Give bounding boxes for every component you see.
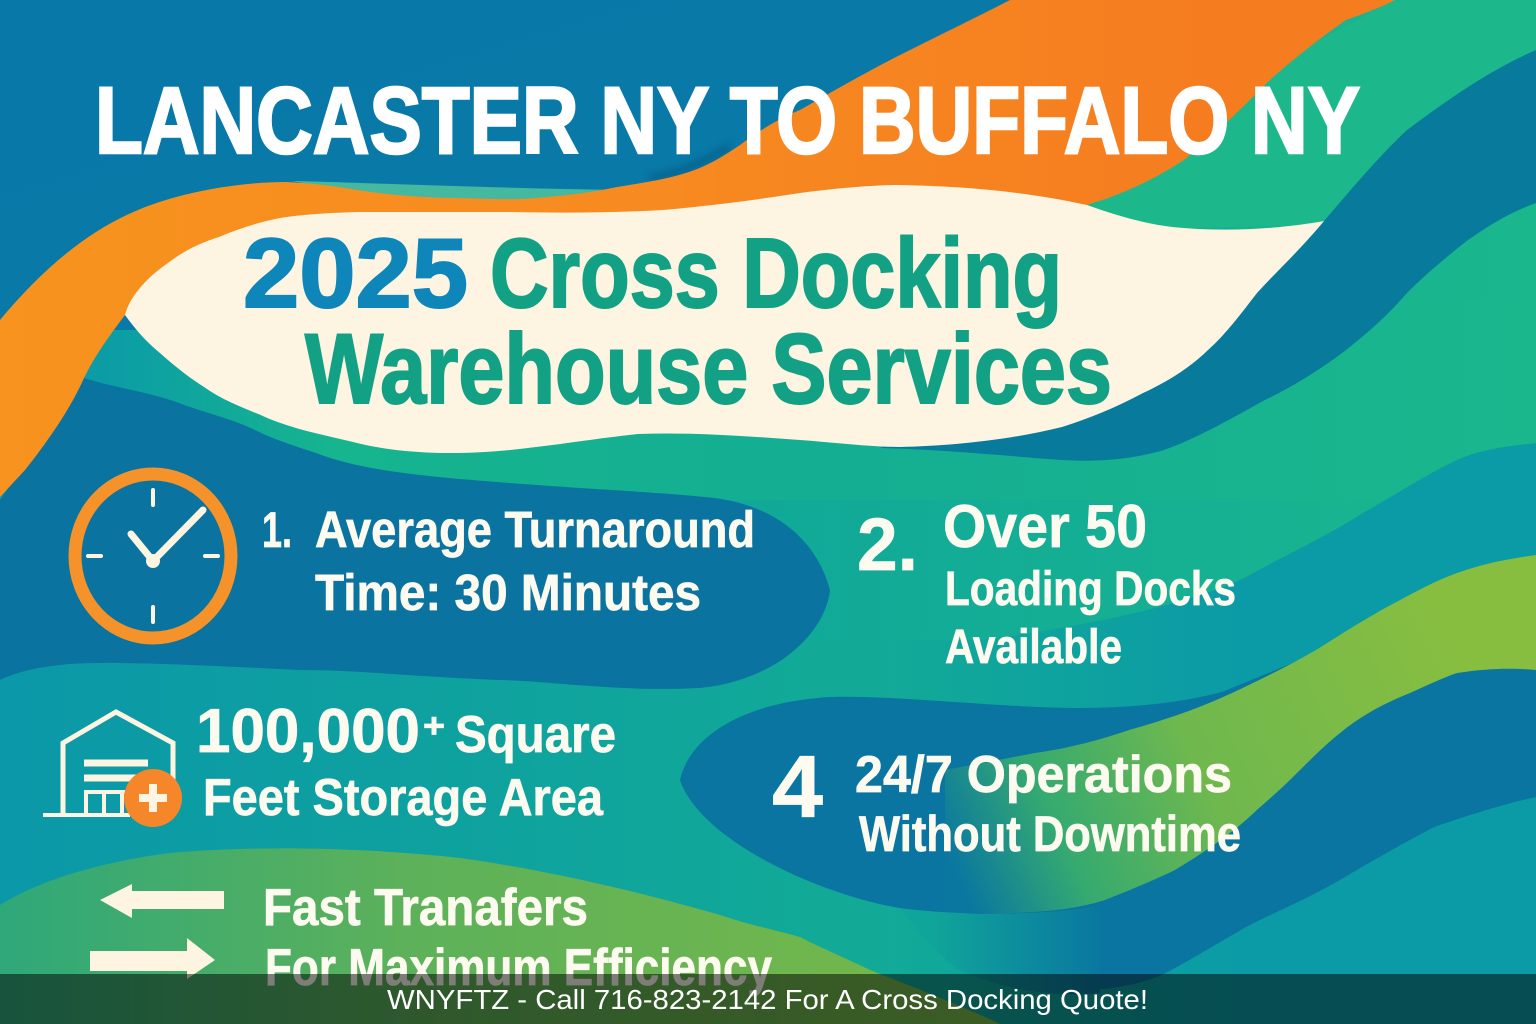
teal wave highlight above orange band	[291, 181, 620, 202]
item 5: fast transfers	[263, 879, 772, 997]
item 1: average turnaround: Time: 30 Minutes	[315, 564, 701, 621]
icon: warehouse with plus badge	[43, 712, 182, 827]
footer bar	[0, 974, 1536, 1024]
headline: 2025 Cross Docking Warehouse Services	[243, 218, 1112, 424]
item 4: 24/7 operations: 24/7 Operations	[855, 746, 1232, 804]
blue blob behind item 4	[680, 640, 1536, 990]
item 1: average turnaround: Average Turnaround	[315, 501, 755, 558]
item 3: storage area: Square	[455, 706, 616, 764]
item 2: loading docks: Over 50	[943, 493, 1147, 560]
item 3: storage area: Feet Storage Area	[203, 769, 604, 827]
item 3: storage area: +	[423, 707, 445, 745]
blue blob fade at lower edge	[900, 905, 1100, 994]
item 5: fast transfers: Fast Tranafers	[263, 879, 588, 937]
icon: transfer arrows	[90, 884, 224, 979]
item 2: loading docks: 2.	[857, 503, 918, 586]
cream headline shape	[125, 185, 1324, 453]
icon: clock with check	[75, 474, 231, 638]
item 3: storage area: 100,000	[196, 697, 420, 766]
item 1: average turnaround	[262, 501, 755, 621]
headline: 2025 Cross Docking Warehouse Services: Cross Docking	[490, 218, 1062, 328]
item 2: loading docks: Available	[945, 621, 1122, 674]
headline: 2025 Cross Docking Warehouse Services: Warehouse Services	[305, 313, 1112, 424]
item 4: 24/7 operations	[772, 737, 1241, 862]
lime hill bottom left	[0, 848, 1000, 1024]
item 5: fast transfers: For Maximum Efficiency	[265, 939, 772, 997]
headline: 2025 Cross Docking Warehouse Services: 2025	[243, 218, 468, 328]
dark blue band behind item 1	[0, 378, 830, 689]
item 1: average turnaround: 1.	[262, 502, 292, 558]
item 3: storage area	[196, 697, 616, 827]
footer bar: WNYFTZ - Call 716-823-2142 For A Cross Docking Quote!	[387, 984, 1148, 1015]
item 4: 24/7 operations: Without Downtime	[859, 806, 1241, 862]
item 2: loading docks	[857, 493, 1236, 674]
orange wave band	[0, 0, 1395, 497]
item 4: 24/7 operations: 4	[772, 737, 823, 836]
item 2: loading docks: Loading Docks	[945, 563, 1236, 616]
lime wave right	[945, 555, 1536, 914]
